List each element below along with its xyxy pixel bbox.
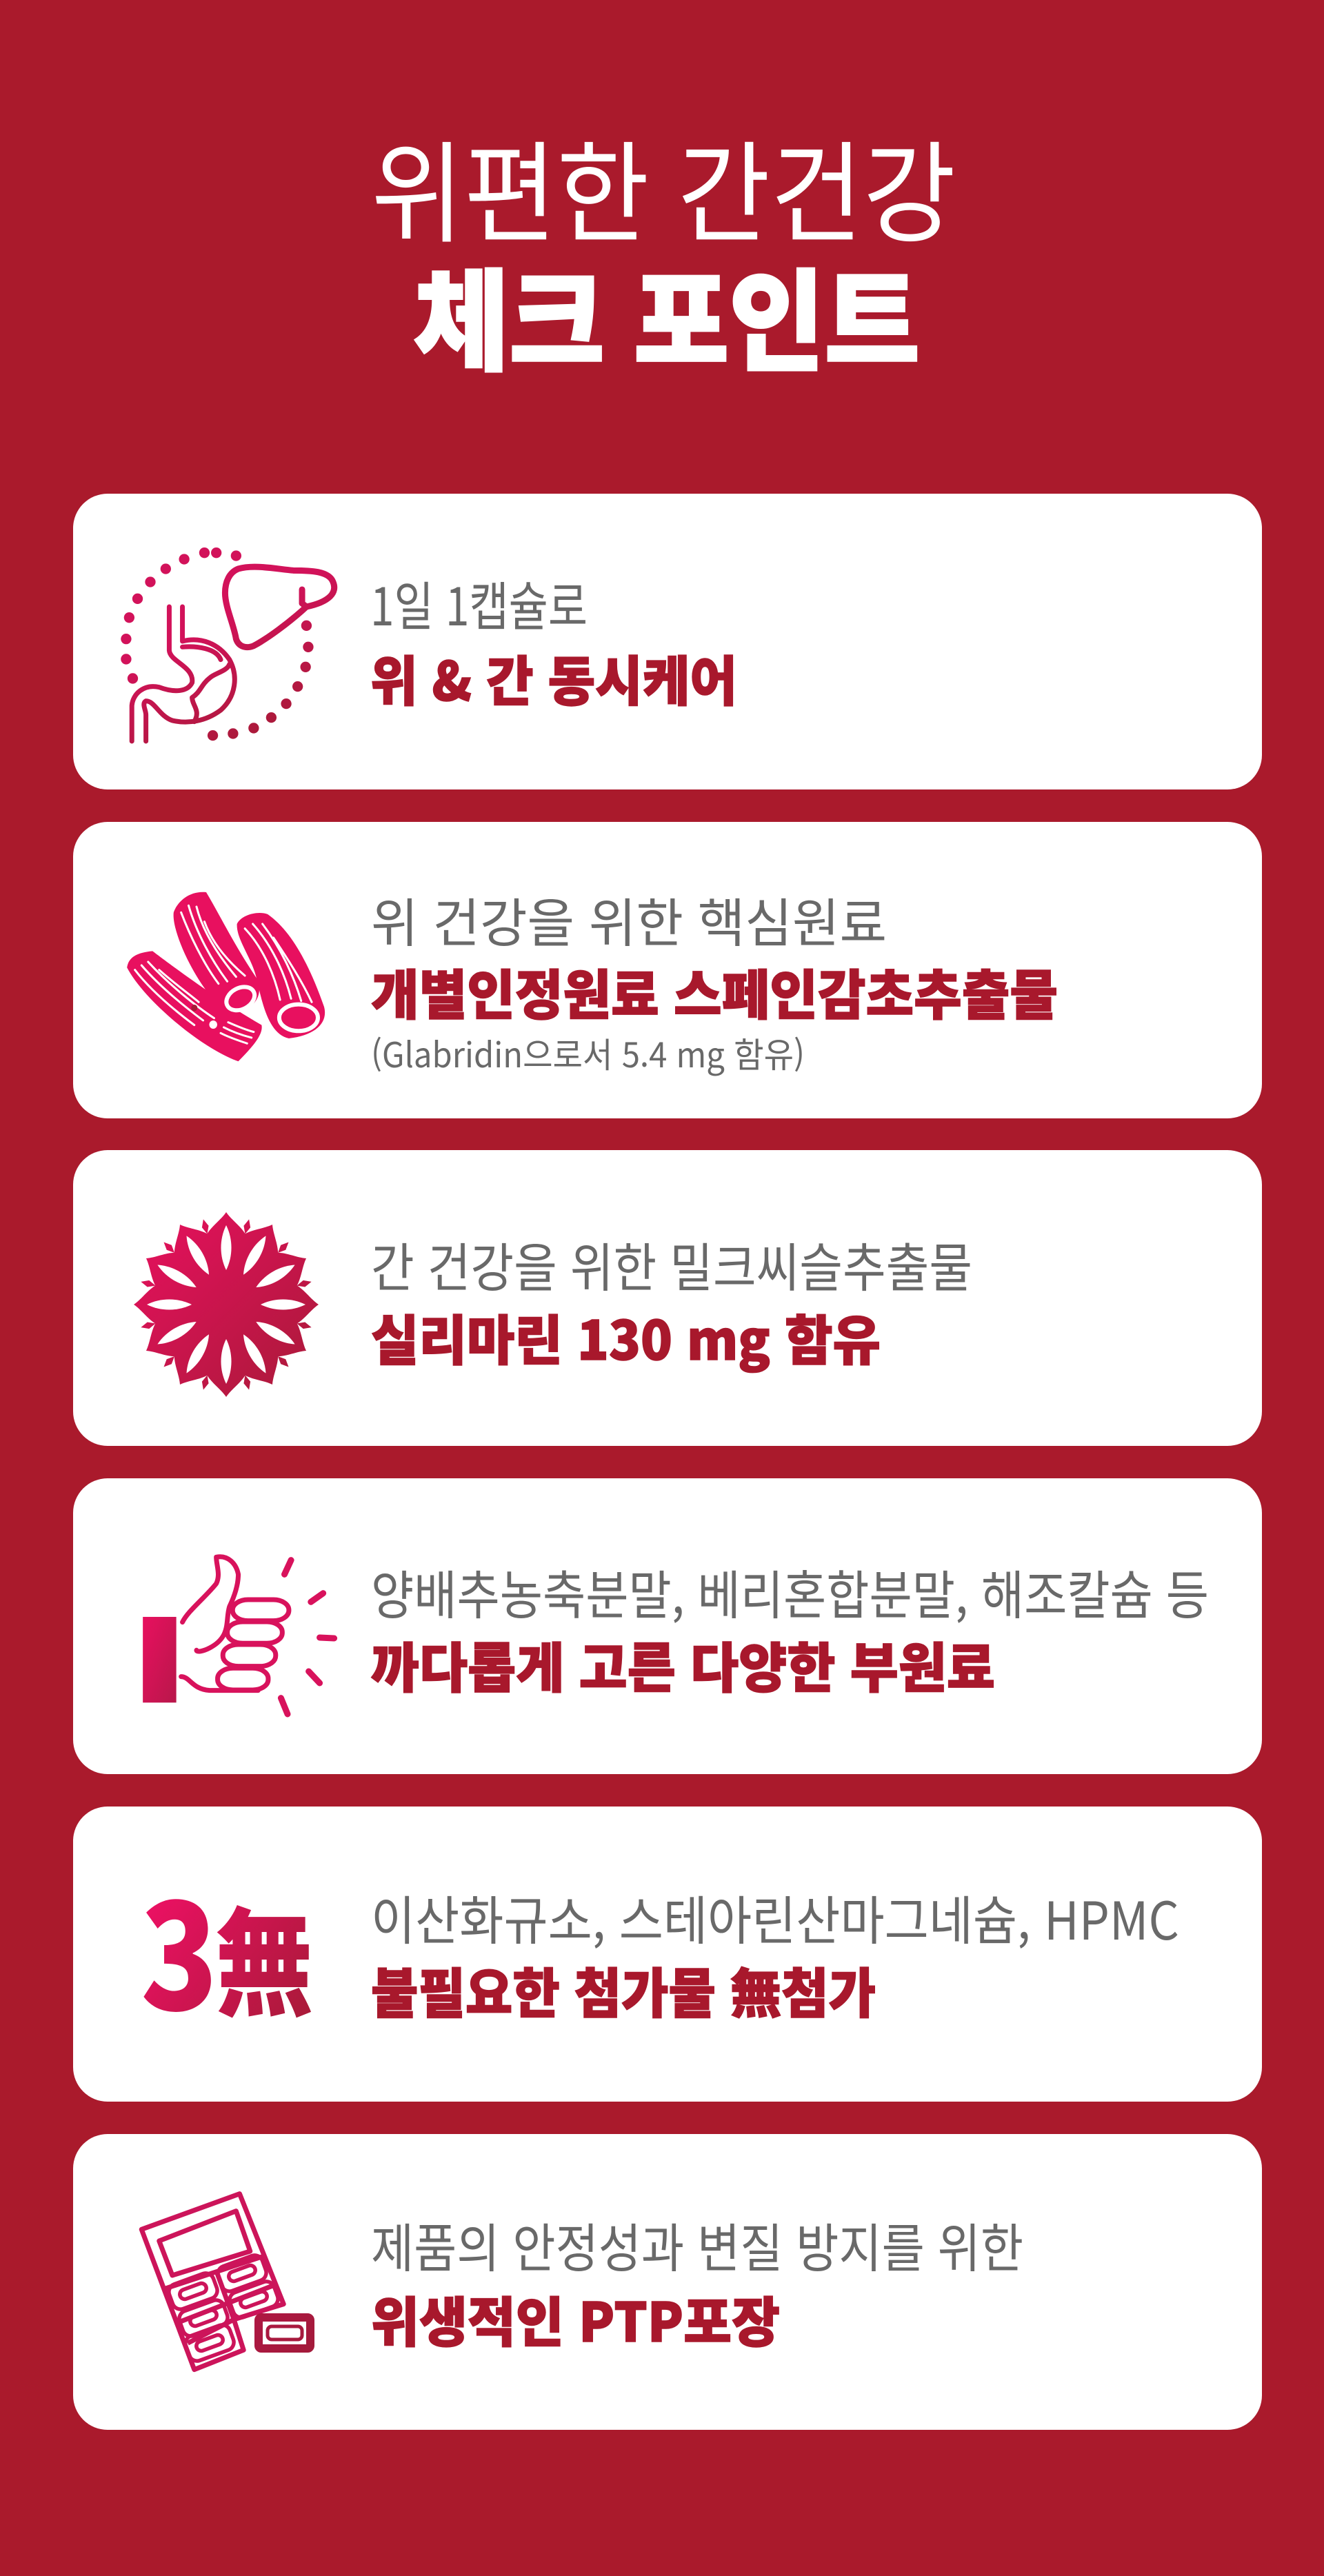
card background	[73, 1150, 1262, 1446]
title line 2: 체크 포인트	[414, 234, 920, 394]
card background	[73, 1478, 1262, 1774]
icon: blister pack	[141, 2194, 310, 2370]
icon: 3 free mark: 3	[141, 1841, 218, 2053]
icon: licorice roots	[127, 892, 325, 1061]
line 1: 1일 1캡슐로	[370, 565, 588, 641]
icon: 3 free mark	[141, 1841, 313, 2053]
icon: stomach and liver	[121, 547, 334, 741]
panel: milk thistle ingredient	[73, 1150, 1262, 1446]
line 1: 이산화규소, 스테아린산마그네슘, HPMC	[371, 1879, 1179, 1955]
panel: selected sub-ingredients	[73, 1478, 1262, 1774]
title	[371, 105, 956, 394]
title line 1: 위편한 간건강	[371, 105, 956, 265]
line 1: 양배추농축분말, 베리혼합분말, 해조칼슘 등	[371, 1553, 1209, 1629]
line 2: 개별인정원료 스페인감초추출물	[371, 953, 1058, 1030]
line 2: 위 & 간 동시케어	[370, 639, 737, 716]
line 2: 실리마린 130 mg 함유	[371, 1298, 881, 1376]
line 2: 위생적인 PTP포장	[371, 2280, 780, 2357]
icon: thumbs up	[143, 1557, 334, 1714]
card background	[73, 494, 1262, 789]
line 3: (Glabridin으로서 5.4 mg 함유)	[371, 1028, 805, 1078]
panel: licorice ingredient	[73, 822, 1262, 1118]
card background	[73, 1807, 1262, 2102]
line 2: 까다롭게 고른 다양한 부원료	[371, 1626, 995, 1703]
icon: milk thistle flower	[134, 1212, 319, 1397]
line 1: 간 건강을 위한 밀크씨슬추출물	[371, 1226, 972, 1302]
panel: three-free additives	[73, 1807, 1262, 2102]
card background	[73, 822, 1262, 1118]
line 1: 제품의 안정성과 변질 방지를 위한	[371, 2206, 1023, 2282]
line 1: 위 건강을 위한 핵심원료	[371, 881, 887, 957]
card background	[73, 2134, 1262, 2430]
line 2: 불필요한 첨가물 無첨가	[371, 1951, 876, 2029]
panel: PTP packaging	[73, 2134, 1262, 2430]
icon: 3 free mark: 無	[215, 1869, 313, 2041]
panel: once-daily capsule	[73, 494, 1262, 789]
